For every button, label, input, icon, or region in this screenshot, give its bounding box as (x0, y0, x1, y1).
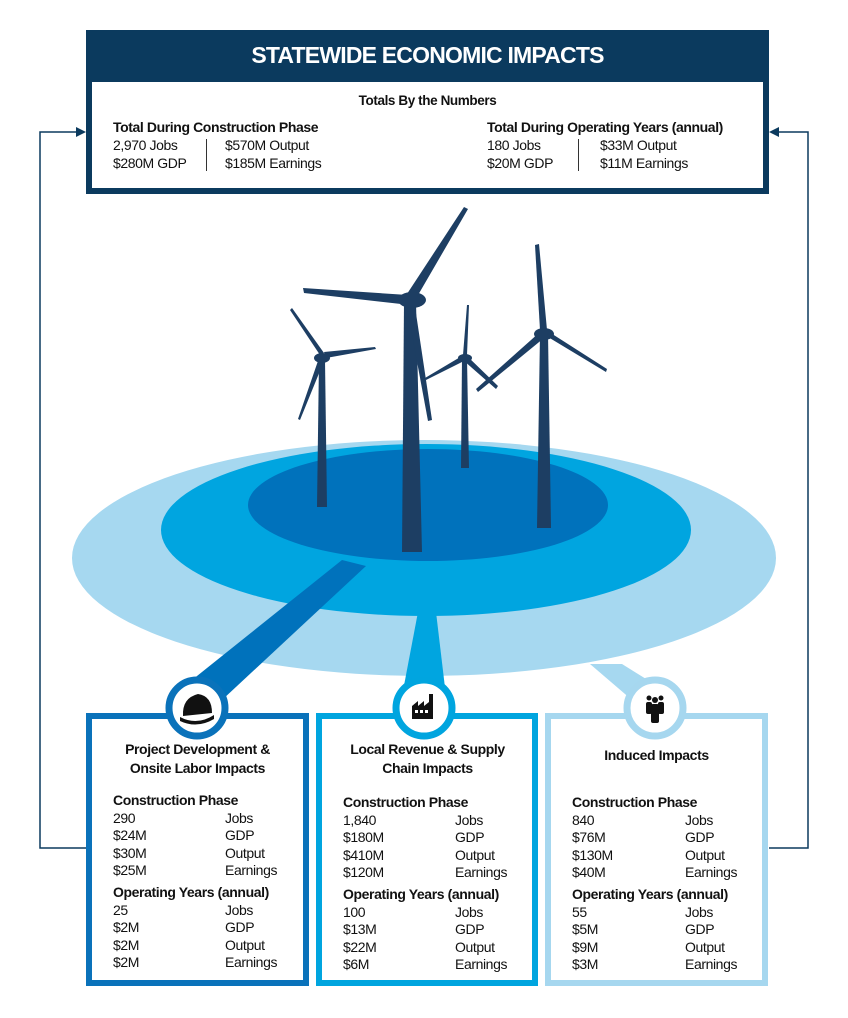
construction data: Earnings (225, 862, 277, 878)
operating data: $6M (343, 956, 369, 972)
operating data: Jobs (685, 904, 713, 920)
heading: Chain Impacts (382, 760, 473, 776)
construction data: Jobs (455, 812, 483, 828)
operating data: $2M (113, 919, 139, 935)
construction data: Output (225, 844, 265, 860)
construction data: GDP (685, 829, 714, 845)
panel frames (89, 716, 765, 983)
operating data: $3M (572, 956, 598, 972)
icon: factory (396, 680, 452, 736)
panel: supply chain (343, 741, 507, 972)
text block: construction totals: 2,970 Jobs (113, 137, 178, 153)
construction data: Construction Phase (572, 794, 697, 810)
operating data: $2M (113, 936, 139, 952)
construction data: Construction Phase (113, 792, 238, 808)
operating data: GDP (685, 921, 714, 937)
operating data: Operating Years (annual) (343, 886, 499, 902)
text block: construction totals: $570M Output (225, 137, 309, 153)
panel: induced (572, 747, 737, 972)
construction data: GDP (225, 827, 254, 843)
construction data: Jobs (225, 810, 253, 826)
header box (86, 30, 769, 194)
operating data: Operating Years (annual) (113, 884, 269, 900)
beam: induced (590, 664, 680, 700)
title: STATEWIDE ECONOMIC IMPACTS (251, 42, 604, 68)
construction data: $30M (113, 844, 146, 860)
heading (350, 741, 505, 776)
operating data: Earnings (685, 956, 737, 972)
text block: operating totals: $11M Earnings (600, 154, 688, 170)
heading: Onsite Labor Impacts (130, 760, 265, 776)
construction data: Construction Phase (343, 794, 468, 810)
operating data (343, 886, 507, 972)
operating data: GDP (225, 919, 254, 935)
operating data: Output (685, 938, 725, 954)
text block: construction totals: $185M Earnings (225, 154, 321, 170)
operating data: $22M (343, 938, 376, 954)
operating data: Operating Years (annual) (572, 886, 728, 902)
construction data (572, 794, 737, 880)
construction data: $120M (343, 864, 384, 880)
operating data: $2M (113, 954, 139, 970)
text block: construction totals (113, 119, 322, 171)
turbine: left (290, 308, 376, 507)
arrow left (40, 127, 86, 848)
construction data: Jobs (685, 812, 713, 828)
heading: Local Revenue & Supply (350, 741, 505, 757)
construction data: 1,840 (343, 812, 376, 828)
text block: operating totals: Total During Operating Years (annual) (487, 119, 723, 135)
construction data: Output (685, 846, 725, 862)
operating data: GDP (455, 921, 484, 937)
heading: Induced Impacts (604, 747, 709, 763)
text block: operating totals: 180 Jobs (487, 137, 541, 153)
turbine: right (476, 244, 607, 528)
operating data: Jobs (455, 904, 483, 920)
operating data (572, 886, 737, 972)
construction data: $40M (572, 864, 605, 880)
operating data: Output (455, 938, 495, 954)
text block: construction totals: Total During Construction Phase (113, 119, 318, 135)
text block: construction totals: $280M GDP (113, 154, 186, 170)
beam: direct (172, 560, 366, 700)
operating data: 100 (343, 904, 365, 920)
construction data (113, 792, 277, 878)
ellipses: impact rings (72, 440, 776, 676)
operating data: Earnings (455, 956, 507, 972)
operating data: $13M (343, 921, 376, 937)
beam: supply chain (402, 612, 446, 696)
turbine: small middle (425, 305, 498, 468)
text block: operating totals: $20M GDP (487, 154, 553, 170)
turbine: center big (303, 207, 468, 552)
construction data: 290 (113, 810, 135, 826)
construction data: $410M (343, 846, 384, 862)
construction data: $130M (572, 846, 613, 862)
icon: hard hat (169, 680, 225, 736)
arrow right (769, 127, 808, 848)
construction data: Earnings (685, 864, 737, 880)
construction data: $76M (572, 829, 605, 845)
operating data: 55 (572, 904, 587, 920)
construction data: GDP (455, 829, 484, 845)
heading: Project Development & (125, 741, 270, 757)
heading (125, 741, 270, 776)
text block: operating totals (487, 119, 723, 171)
icon: people (627, 680, 683, 736)
operating data: Earnings (225, 954, 277, 970)
operating data (113, 884, 277, 970)
construction data: Output (455, 846, 495, 862)
operating data: Output (225, 936, 265, 952)
construction data: $180M (343, 829, 384, 845)
construction data (343, 794, 507, 880)
construction data: 840 (572, 812, 594, 828)
operating data: $5M (572, 921, 598, 937)
construction data: Earnings (455, 864, 507, 880)
operating data: Jobs (225, 902, 253, 918)
operating data: $9M (572, 938, 598, 954)
subtitle: totals: Totals By the Numbers (359, 93, 496, 108)
panel: project development (113, 741, 277, 970)
construction data: $24M (113, 827, 146, 843)
operating data: 25 (113, 902, 128, 918)
construction data: $25M (113, 862, 146, 878)
text block: operating totals: $33M Output (600, 137, 677, 153)
